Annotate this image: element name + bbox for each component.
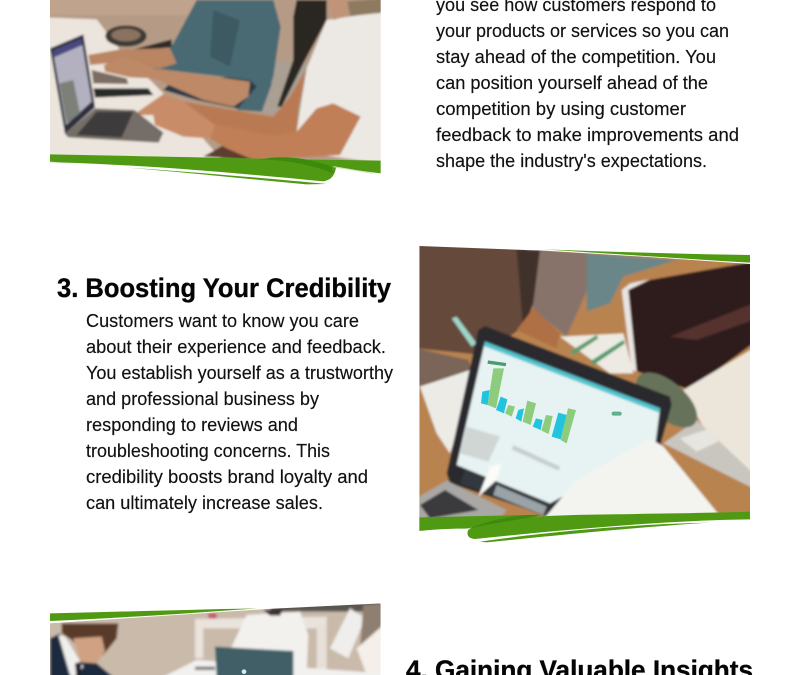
panel: section 2 photo, laptops on a table — [47, 0, 383, 184]
text block: section 3 body copy: Customers want to know you care — [86, 311, 359, 331]
text block: section 2 body copy: your products or services so you can — [436, 21, 729, 41]
heading: section 3: 3. Boosting Your Credibility — [57, 273, 391, 303]
text block: section 2 body copy: competition by using customer — [436, 99, 686, 119]
text block: section 3 body copy — [86, 311, 393, 513]
photo: two people typing — [47, 0, 383, 163]
text block: section 3 body copy: credibility boosts brand loyalty and — [86, 467, 368, 487]
swoosh: green stroke below photo — [419, 512, 750, 542]
swoosh: green brush stroke below photo — [50, 154, 381, 184]
text block: section 2 body copy — [436, 0, 739, 171]
text block: section 2 body copy: can position yourself ahead of the — [436, 73, 708, 93]
panel: section 4 photo, business meeting — [47, 602, 383, 675]
swoosh: green stroke above photo — [50, 608, 257, 621]
text block: section 3 body copy: about their experience and feedback. — [86, 337, 386, 357]
photo: people at a white table — [47, 602, 383, 675]
text block: section 2 body copy: stay ahead of the competition. You — [436, 47, 716, 67]
text block: section 3 body copy: can ultimately increase sales. — [86, 493, 323, 513]
text block: section 3 body copy: responding to reviews and — [86, 415, 298, 435]
panel: section 3 photo, laptop with bar chart — [417, 243, 753, 542]
text block: section 3 body copy: and professional business by — [86, 389, 319, 409]
text block: section 2 body copy: feedback to make improvements and — [436, 125, 739, 145]
photo: analytics laptop on a desk — [417, 243, 753, 520]
bar chart on laptop screen — [481, 360, 622, 443]
text block: section 3 body copy: troubleshooting concerns. This — [86, 441, 330, 461]
swoosh: green stroke above photo — [543, 249, 750, 263]
text block: section 3 body copy: You establish yourself as a trustworthy — [86, 363, 393, 383]
text block: section 2 body copy: shape the industry's expectations. — [436, 151, 707, 171]
